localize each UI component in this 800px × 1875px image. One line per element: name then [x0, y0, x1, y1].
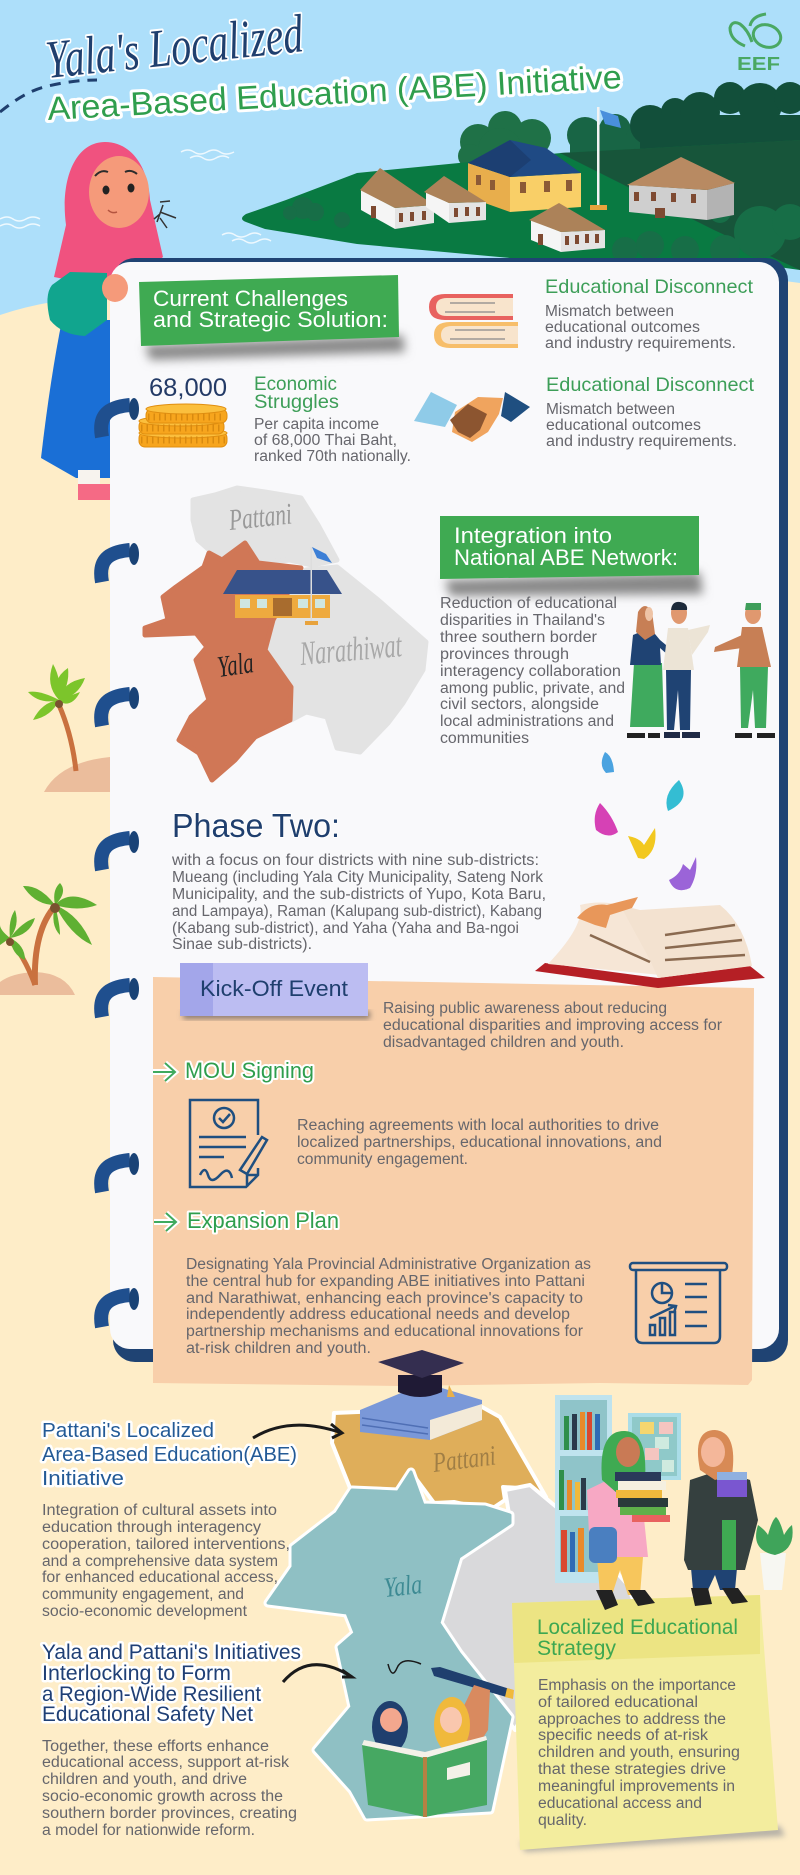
- text: phase two body: Municipality, and the sub-districts of Yupo, Kota Baru,: [172, 886, 546, 903]
- label: Pattani: Pattani: [430, 1441, 497, 1479]
- text: interlocking body: a model for nationwide reform.: [42, 1822, 255, 1839]
- text: integration body: civil sectors, alongside: [440, 696, 599, 713]
- heading: interlocking initiatives: [42, 1641, 301, 1726]
- text: kick-off body: educational disparities and improving access for: [383, 1017, 722, 1034]
- bookshelf: [555, 1395, 612, 1583]
- text: interlocking body: educational access, support at-risk: [42, 1754, 289, 1771]
- text: kick-off body: [383, 1000, 722, 1051]
- heading: integration: National ABE Network:: [454, 545, 678, 570]
- text: interlocking body: [42, 1738, 297, 1839]
- peach paper: [153, 977, 754, 1386]
- butterflies: [595, 752, 696, 890]
- heading: interlocking initiatives: a Region-Wide Resilient: [42, 1683, 261, 1706]
- text: integration body: communities: [440, 730, 529, 747]
- sticky body: quality.: [538, 1812, 587, 1829]
- heading: MOU signing: MOU Signing: [185, 1058, 314, 1083]
- sticky body: children and youth, ensuring: [538, 1744, 740, 1761]
- heading: Pattani initiative: [42, 1419, 297, 1490]
- map label: Pattani: Pattani: [227, 498, 293, 537]
- icon: handshake: [414, 392, 530, 442]
- heading: current challenges: and Strategic Solution:: [153, 307, 388, 332]
- text: integration body: Reduction of educational: [440, 595, 617, 612]
- stat: 68,000: 68,000: [149, 374, 227, 402]
- text: expansion body: at-risk children and youth.: [186, 1340, 371, 1357]
- text: educational disconnect 2: and industry requirements.: [546, 433, 737, 450]
- text: economic struggles: Economic: [254, 373, 337, 395]
- text: phase two body: with a focus on four districts with nine sub-districts:: [171, 852, 539, 869]
- text: phase two body: and Lampaya), Raman (Kalupang sub-district), Kabang: [172, 903, 542, 920]
- bottom map: Pattani: [332, 1407, 546, 1510]
- palm tree small: [28, 664, 110, 792]
- sticky body: of tailored educational: [538, 1694, 698, 1711]
- bottom map: Narathiwat: [439, 1485, 640, 1730]
- text: educational disconnect 2: Mismatch between: [546, 401, 675, 418]
- text: educational disconnect 1: educational outcomes: [545, 319, 700, 336]
- cork board: [628, 1413, 681, 1480]
- student with purple book: [684, 1430, 758, 1606]
- waves: [0, 150, 271, 243]
- text: economic struggles: Per capita income: [254, 416, 379, 433]
- text: Pattani body: community engagement, and: [42, 1586, 244, 1603]
- text: integration body: disparities in Thailand's: [440, 612, 605, 629]
- text: Pattani body: for enhanced educational access,: [42, 1569, 278, 1586]
- house 1: [360, 168, 434, 229]
- sticky heading: [537, 1616, 738, 1660]
- text: expansion body: and Narathiwat, enhancing each province's capacity to: [186, 1290, 583, 1307]
- heading: interlocking initiatives: Yala and Pattani's Initiatives: [42, 1641, 301, 1664]
- dashed flight path: [0, 80, 97, 112]
- sticky body: Emphasis on the importance: [538, 1677, 736, 1694]
- text: economic struggles: of 68,000 Thai Baht,: [254, 432, 397, 449]
- text: interlocking body: southern border provinces, creating: [42, 1805, 297, 1822]
- text: expansion body: [186, 1256, 591, 1357]
- map: three provinces: [145, 488, 426, 780]
- icon: signed document: [190, 1100, 267, 1187]
- text: educational disconnect 1: Mismatch between: [545, 303, 674, 320]
- sticky heading: Strategy: [537, 1637, 616, 1660]
- title: [43, 3, 622, 127]
- main notebook panel: [110, 258, 788, 1362]
- text: phase two body: [171, 852, 546, 953]
- bottom map: Yala: [268, 1472, 510, 1817]
- text: MOU body: Reaching agreements with local authorities to drive: [297, 1117, 659, 1134]
- sticky body: that these strategies drive: [538, 1761, 726, 1778]
- text: interlocking body: socio-economic growth across the: [42, 1788, 283, 1805]
- sticky heading: Localized Educational: [537, 1616, 738, 1639]
- text: Pattani body: education through interagency: [42, 1519, 261, 1536]
- text: Pattani body: cooperation, tailored interventions,: [42, 1536, 290, 1553]
- icon: coins: [139, 404, 227, 447]
- label: Yala: Yala: [382, 1569, 424, 1604]
- text: educational disconnect 2: educational outcomes: [546, 417, 701, 434]
- house 3: [529, 203, 605, 252]
- student with stack of books: [587, 1431, 670, 1610]
- school on map: [223, 547, 342, 625]
- heading: integration: Integration into: [454, 523, 612, 548]
- heading: current challenges: [139, 275, 405, 360]
- text: economic struggles: [254, 373, 411, 465]
- girl character: [41, 142, 176, 500]
- text: expansion body: independently address educational needs and develop: [186, 1306, 570, 1323]
- sticky body: approaches to address the: [538, 1711, 726, 1728]
- text: educational disconnect 2: [546, 374, 755, 450]
- title: Area-Based Education (ABE) Initiative: [46, 58, 622, 127]
- girl hand: [102, 274, 128, 302]
- text: integration body: among public, private, and: [440, 680, 625, 697]
- map label: Narathiwat: Narathiwat: [298, 627, 404, 673]
- text: phase two body: Mueang (including Yala City Municipality, Sateng Nork: [172, 869, 543, 886]
- house 4: [627, 157, 735, 220]
- text: integration body: provinces through: [440, 646, 569, 663]
- heading: Pattani initiative: Area-Based Education(ABE): [42, 1443, 297, 1466]
- text: educational disconnect 1: and industry requirements.: [545, 335, 736, 352]
- text: educational disconnect 2: Educational Disconnect: [546, 374, 755, 396]
- arrow to Pattani: [253, 1424, 342, 1438]
- heading: interlocking initiatives: Interlocking to Form: [42, 1662, 231, 1685]
- text: kick-off body: disadvantaged children and youth.: [383, 1034, 624, 1051]
- text: educational disconnect 1: [545, 276, 754, 352]
- text: interlocking body: children and youth, and drive: [42, 1771, 247, 1788]
- text: economic struggles: ranked 70th nationally.: [254, 448, 411, 465]
- text: Pattani body: [42, 1502, 290, 1620]
- icon: books: [429, 294, 518, 348]
- text: interlocking body: Together, these efforts enhance: [42, 1738, 269, 1755]
- graduation cap and books: [360, 1350, 482, 1440]
- text: integration body: interagency collaboration: [440, 663, 621, 680]
- text: expansion body: partnership mechanisms and educational innovations for: [186, 1323, 583, 1340]
- text: integration body: [440, 595, 625, 747]
- text: Pattani body: Integration of cultural assets into: [42, 1502, 277, 1519]
- text: MOU body: localized partnerships, educational innovations, and: [297, 1134, 662, 1151]
- heading: current challenges: Current Challenges: [153, 286, 348, 311]
- heading: phase two: Phase Two:: [172, 807, 340, 844]
- house 2: [424, 176, 486, 223]
- map label: Yala: Yala: [215, 646, 256, 684]
- text: phase two body: (Kabang sub-district), and Yaha (Yaha and Ba-ngoi: [172, 920, 519, 937]
- heading: expansion plan: Expansion Plan: [187, 1208, 339, 1233]
- sticky body: meaningful improvements in: [538, 1778, 735, 1795]
- text: Pattani body: socio-economic development: [42, 1603, 248, 1620]
- text: MOU body: [297, 1117, 662, 1168]
- heading: interlocking initiatives: Educational Safety Net: [42, 1703, 253, 1726]
- binder rings: [101, 398, 139, 1327]
- EEF logo: EEF: [737, 54, 780, 74]
- potted plant: [756, 1517, 793, 1590]
- text: expansion body: the central hub for expanding ABE initiatives into Pattani: [186, 1273, 585, 1290]
- icon: presentation board: [630, 1263, 727, 1343]
- tab: kick-off event: [180, 963, 370, 1019]
- text: expansion body: Designating Yala Provincial Administrative Organization as: [186, 1256, 591, 1273]
- heading: Pattani initiative: Pattani's Localized: [42, 1419, 214, 1442]
- flagpole: [590, 107, 621, 210]
- text: educational disconnect 1: Educational Disconnect: [545, 276, 754, 298]
- text: kick-off body: Raising public awareness about reducing: [383, 1000, 667, 1017]
- icon: open book: [535, 897, 765, 988]
- sticky body: educational access and: [538, 1795, 702, 1812]
- people illustration: [627, 602, 775, 738]
- island with trees: [242, 82, 800, 270]
- yellow school building: [468, 140, 581, 212]
- heading: integration: [440, 516, 703, 596]
- text: integration body: three southern border: [440, 629, 597, 646]
- text: Pattani body: and a comprehensive data system: [42, 1553, 278, 1570]
- palm trees large: [0, 883, 97, 995]
- text: MOU body: community engagement.: [297, 1151, 468, 1168]
- heading: Pattani initiative: Initiative: [42, 1467, 124, 1490]
- text: phase two body: Sinae sub-districts).: [172, 936, 312, 953]
- EEF logo: [730, 14, 784, 74]
- text: economic struggles: Struggles: [254, 391, 339, 413]
- kids reading with pencil: [362, 1661, 514, 1817]
- sticky body: [538, 1677, 740, 1829]
- text: integration body: local administrations and: [440, 713, 614, 730]
- sticky note: [512, 1595, 785, 1852]
- sticky body: specific needs of at-risk: [538, 1727, 708, 1744]
- tab: kick-off event: Kick-Off Event: [200, 976, 348, 1001]
- arrow to Yala: [283, 1665, 352, 1682]
